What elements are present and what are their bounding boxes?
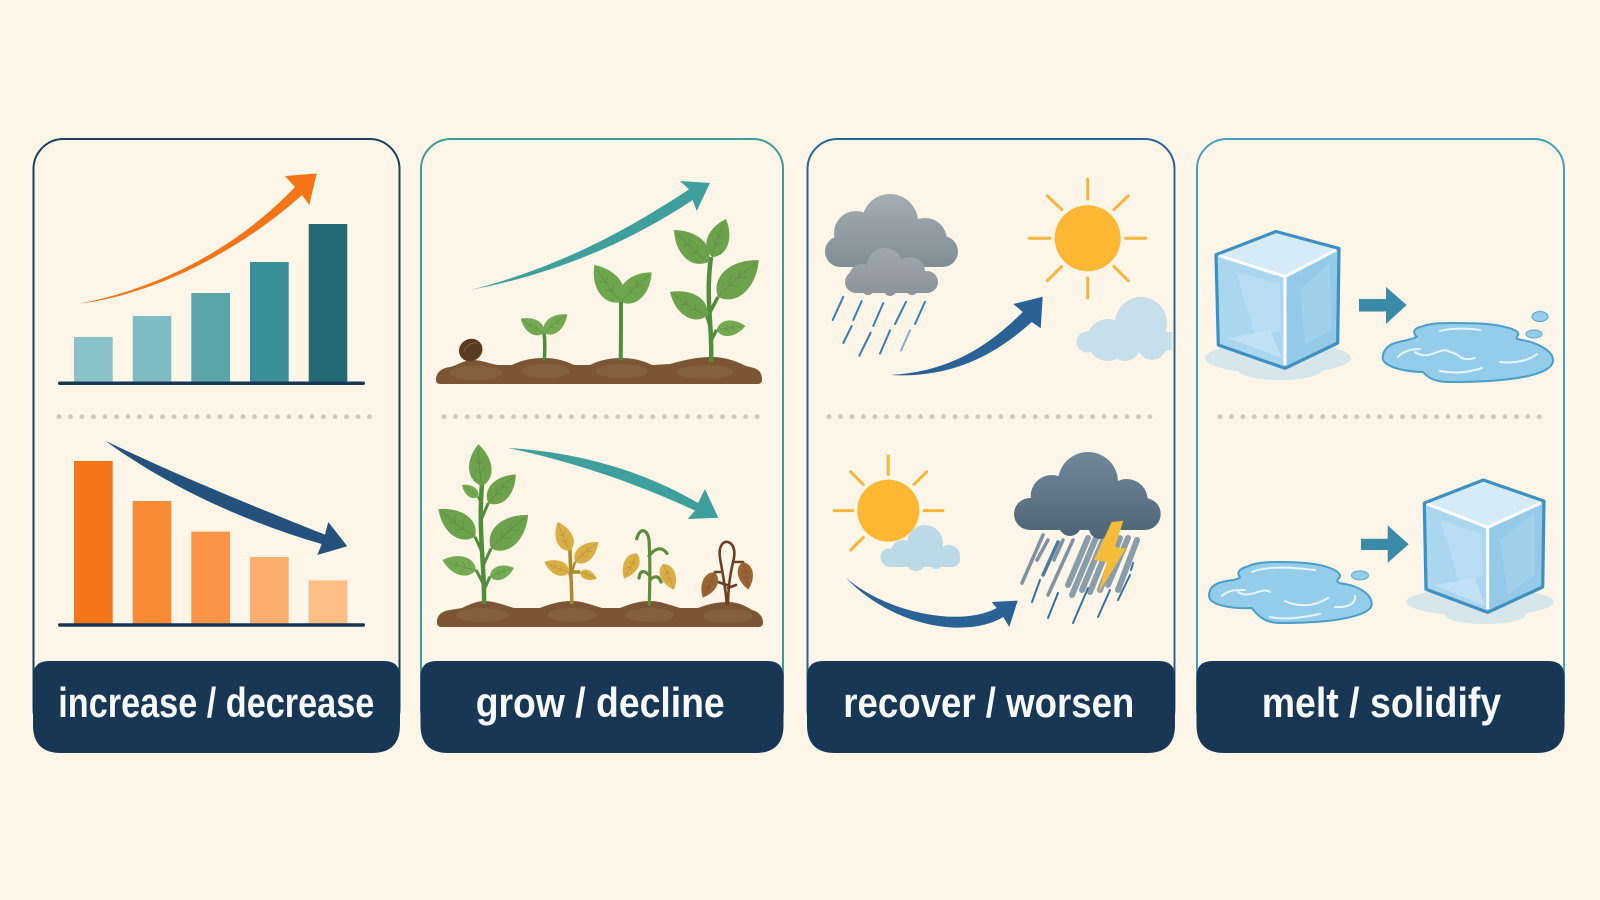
panel frame xyxy=(808,139,1174,739)
icon: healthy plant xyxy=(431,443,537,604)
soil: upper xyxy=(436,357,762,384)
icon: tall plant xyxy=(664,215,769,362)
label band: grow / decline xyxy=(476,679,725,726)
icon: water puddle xyxy=(1383,312,1553,382)
label band xyxy=(33,661,400,753)
divider dots xyxy=(829,414,1150,419)
arrow: blue worsening xyxy=(846,578,1018,628)
panel: increase / decrease xyxy=(33,139,400,753)
icon: rain cloud xyxy=(825,194,958,356)
icon: sun with cloud xyxy=(834,456,960,571)
icon: medium sprout xyxy=(584,258,659,360)
falling bar chart xyxy=(58,461,365,627)
icon: small sprout xyxy=(517,308,572,360)
label band: recover / worsen xyxy=(843,679,1134,726)
divider dots xyxy=(444,414,759,419)
arrow: solidify xyxy=(1361,525,1409,563)
arrow: orange rising xyxy=(80,174,317,304)
panel: grow / decline xyxy=(420,139,784,753)
panel: recover / worsen xyxy=(807,139,1175,753)
arrow: navy falling xyxy=(105,441,347,555)
arrow: teal growth xyxy=(470,181,710,290)
soil: lower xyxy=(437,601,763,627)
divider dots xyxy=(59,414,371,419)
icon: ice cube forming xyxy=(1406,480,1554,624)
icon: sun xyxy=(1029,179,1146,298)
icon: water puddle xyxy=(1209,562,1372,623)
icon: seed xyxy=(455,334,487,366)
label band xyxy=(1196,661,1564,753)
panel frame xyxy=(34,139,400,739)
label band xyxy=(807,661,1175,753)
panel: melt / solidify xyxy=(1196,139,1564,753)
icon: storm cloud with lightning xyxy=(1014,452,1161,623)
divider dots xyxy=(1220,414,1541,419)
arrow: melt xyxy=(1359,287,1407,324)
icon: wilting plant xyxy=(617,531,681,604)
arrow: blue recovery xyxy=(890,297,1043,375)
rising bar chart xyxy=(58,224,365,385)
panel frame xyxy=(1197,139,1564,739)
icon: light cloud xyxy=(1076,297,1172,361)
arrow: teal decline xyxy=(508,448,718,519)
label band: increase / decrease xyxy=(58,679,374,726)
icon: ice cube melting xyxy=(1205,232,1351,380)
icon: yellowing plant xyxy=(542,519,604,604)
label band xyxy=(420,661,784,753)
icon: dead plant xyxy=(696,542,756,604)
label band: melt / solidify xyxy=(1262,679,1502,726)
panel frame xyxy=(421,139,783,739)
